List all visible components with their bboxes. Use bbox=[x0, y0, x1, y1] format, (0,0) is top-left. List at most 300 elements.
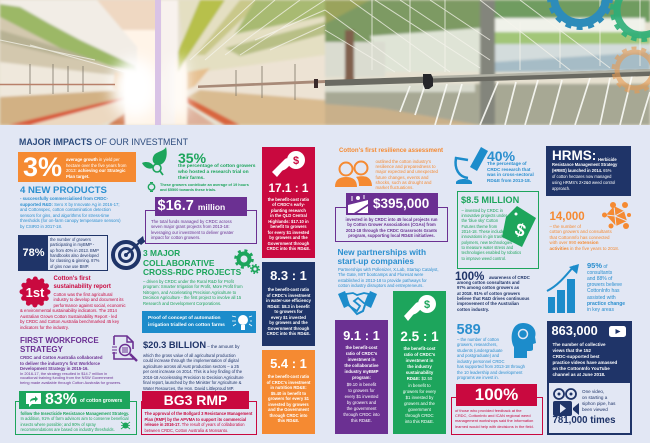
text: local projects: invested in by CRDC into 45 local projects run bbox=[346, 216, 437, 222]
text: workforce funding: being made available through Cotton Australia for growers. bbox=[20, 380, 121, 384]
stat: 78% bbox=[19, 236, 48, 270]
text: channel as at June 2018. bbox=[552, 372, 605, 377]
text: BG3 RMP approval: Plan (RMP) by the APVMA to support its commercial bbox=[144, 417, 246, 422]
text bbox=[266, 196, 310, 251]
text: growers contribution bbox=[160, 183, 249, 192]
text: insecticide strategy: follow the Insecticide Resistance Management Strategy. bbox=[20, 410, 129, 416]
text: sustainability report bbox=[20, 292, 126, 330]
text: sustainability report: Cotton was the first agricultural bbox=[54, 292, 112, 296]
text: on starting a bbox=[582, 394, 607, 400]
text: insecticide strategy: In addition, 91% of farm advisors aim to conserve beneficial bbox=[20, 416, 129, 421]
icon: stopwatch bbox=[148, 182, 156, 192]
text: by growers and the bbox=[269, 235, 308, 240]
text: growers in myBMP: for classing & ginning. 87% bbox=[50, 258, 99, 263]
stat: 35%: 35% bbox=[178, 150, 206, 166]
text: of CRDC's investment bbox=[267, 380, 310, 385]
text: growers contribution: These growers contribute an average of 19 hours bbox=[160, 183, 249, 187]
text: local projects: 2013-18 through the CRDC Grassroots Grants bbox=[346, 228, 437, 233]
text: research trial bbox=[178, 164, 256, 181]
banner bbox=[19, 391, 130, 409]
text: new products: and Cottonspec, cotton contamination detection bbox=[20, 207, 111, 212]
text: CRDC into this RD&E. bbox=[267, 246, 310, 251]
text: sustainability bbox=[406, 370, 433, 375]
text: on the CottonInfo YouTube bbox=[552, 366, 610, 371]
outline bbox=[145, 210, 257, 244]
icon: connected hub bbox=[602, 202, 631, 230]
text: in nutrition RD&E: bbox=[270, 385, 307, 390]
text: resilience assessment: shocks, such as drought and bbox=[376, 180, 431, 185]
text: 14,000: – the number of bbox=[550, 224, 581, 228]
stat: 589: 589 bbox=[456, 322, 481, 338]
text: polymers, new technologies bbox=[462, 240, 512, 245]
panel: HRMS bbox=[546, 146, 631, 196]
text: RD&E: $2.50 bbox=[407, 376, 432, 381]
outline bbox=[15, 401, 137, 435]
text: cross-sectoral research: was in cross-sectoral bbox=[487, 172, 534, 177]
text: and the Government bbox=[268, 407, 309, 412]
text: approach. bbox=[552, 186, 570, 191]
text: resilience assessment: resilience and preparedness to bbox=[376, 164, 436, 169]
text: invested by growers bbox=[268, 402, 309, 407]
panel: automation irrigation callout bbox=[142, 311, 256, 333]
text: new partnerships bbox=[338, 266, 439, 289]
text: 95% consultants: consultants bbox=[587, 270, 612, 276]
text: new products: by CSIRO in 2017-18. bbox=[20, 224, 62, 229]
text bbox=[552, 342, 617, 378]
text: growers in myBMP: up from 40% in 2013. BMP bbox=[50, 248, 99, 253]
card: 5.4:1 bbox=[262, 350, 315, 434]
text: sustainability report: indicators for the industry. bbox=[20, 325, 69, 330]
heading: resilience assessment: Cotton's first resilience assessment bbox=[339, 147, 443, 154]
inset: one video bbox=[548, 383, 630, 433]
text: using HRMS's 2×2&0 weed control bbox=[552, 180, 615, 185]
text: resilience assessment: market fluctuations. bbox=[376, 185, 414, 190]
text: awareness: among cotton consultants and bbox=[457, 280, 520, 285]
text: research trial: who hosted a research trial on bbox=[178, 170, 249, 175]
text: every $1 invested bbox=[271, 315, 306, 320]
text: 589 people: growers, researchers, bbox=[457, 342, 498, 347]
text: to growers for bbox=[274, 309, 303, 314]
text: workforce funding bbox=[20, 370, 121, 385]
stat: $395,000 bbox=[373, 196, 429, 211]
text: new products: thresholds (for on-farm canopy temperature sensors) bbox=[20, 218, 121, 223]
stat: 781,000 times bbox=[552, 415, 616, 426]
text: CRDC into this RD&E. bbox=[267, 331, 310, 336]
text: yield growth: average growth in yield per bbox=[66, 157, 120, 162]
icon: document with magnifier bbox=[112, 335, 138, 362]
text: 95% consultants: CottonInfo has bbox=[587, 288, 620, 294]
text: The number of collective bbox=[552, 342, 606, 346]
text: – invested by CRDC in bbox=[462, 208, 503, 212]
text: new partnerships: Partnerships with Pollenizer, X.Lab, Startup Catalyst, bbox=[338, 266, 439, 272]
text: 14,000: that CottonInfo has connected bbox=[550, 235, 610, 240]
text: awareness: 97% among cotton growers as bbox=[457, 285, 519, 290]
text: cross-sectoral research: CRDC research that bbox=[487, 167, 530, 172]
card: 2.5:1 bbox=[393, 291, 446, 434]
text: digital agriculture bbox=[143, 353, 244, 391]
text: innovations in gin trash, bbox=[462, 234, 505, 239]
text: growers in myBMP: handbooks also developed bbox=[50, 253, 99, 258]
text: resilience assessment: outlined the cotton industry's bbox=[376, 158, 431, 164]
text: ratio of CRDC's bbox=[346, 351, 377, 356]
text: workforce funding: In 2016-17, the strategy resulted in $14.7 million in bbox=[20, 370, 107, 376]
text: sustainability report: & environmental sustainability indicators. The 2014 bbox=[20, 308, 117, 313]
stat: 78%: 78% bbox=[22, 247, 45, 259]
text: new products bbox=[20, 196, 121, 229]
card: 17.1:1 bbox=[262, 147, 315, 258]
heading: new partnerships: start-up companies bbox=[338, 256, 414, 266]
text: growers and the bbox=[404, 401, 435, 406]
icon: video play bbox=[608, 326, 626, 337]
text: major grant projects: impact for cotton growers. bbox=[151, 235, 200, 240]
text: the benefit-cost bbox=[346, 345, 378, 350]
text: planting research bbox=[271, 208, 306, 213]
text: this RD&E. bbox=[351, 418, 372, 423]
text: sustainability report: Australian Grown Cotton Sustainability Report - led bbox=[20, 314, 117, 319]
text: 95% consultants bbox=[587, 270, 625, 313]
text: management workshops said the information bbox=[455, 418, 533, 423]
banner bbox=[456, 384, 537, 406]
text: the industry bbox=[407, 364, 432, 369]
text: to improve weed control. bbox=[462, 256, 506, 261]
text: RD&E: $8.3 in benefit bbox=[267, 304, 310, 309]
banner: $16.7 million bbox=[158, 198, 225, 214]
hero photo: cotton spinning mill bbox=[0, 0, 650, 125]
text: CRDC-supported best bbox=[552, 354, 600, 359]
icon: 1st badge bbox=[20, 276, 50, 308]
icon: handshake bbox=[338, 291, 377, 315]
icon: microscope bbox=[454, 147, 490, 184]
stat: 83%: 83% bbox=[45, 391, 77, 408]
icon: head with gear bbox=[511, 323, 536, 358]
text: the 'blue sky' Cotton bbox=[462, 218, 498, 223]
text: growers contribution: and $5500 towards these trials. bbox=[160, 188, 216, 192]
stat: 100% awareness: 100% bbox=[455, 271, 484, 283]
text: digital agriculture: per cent increase on 2014. This is a key finding of the bbox=[143, 369, 242, 374]
text: resilience assessment: future changes, events and bbox=[376, 175, 428, 180]
text: practice videos have amassed bbox=[552, 360, 617, 365]
text bbox=[266, 374, 310, 423]
text: through CRDC bbox=[405, 413, 434, 418]
text: workforce strategy: to deliver the industry's first Workforce bbox=[20, 361, 100, 366]
outline bbox=[141, 401, 257, 435]
text: cross-RDC projects bbox=[143, 278, 243, 306]
heading: first workforce strategy: FIRST WORKFORCE bbox=[20, 336, 99, 344]
icon: two people bbox=[335, 160, 372, 187]
text: into this RD&E. bbox=[405, 419, 434, 424]
text: awareness: cotton industry. bbox=[457, 307, 489, 312]
text: 95% consultants: and 88% of bbox=[587, 276, 612, 282]
card: 9.1:1 bbox=[335, 320, 388, 434]
text: this RD&E. bbox=[278, 418, 299, 423]
stat: 3%: 3% bbox=[23, 152, 62, 182]
text: 14,000: activities in the five years to 2018. bbox=[550, 246, 619, 251]
text: growers in myBMP: the number of growers bbox=[50, 237, 91, 242]
text: cross-RDC projects: Nitrogen, and Accelerating Precision Agriculture to bbox=[143, 290, 236, 295]
text: major grant projects: leveraging our investment to deliver greater bbox=[151, 230, 234, 235]
text: insecticide strategy: insects where possible; and 90% of spray bbox=[20, 422, 96, 427]
heading: new partnerships: New partnerships with bbox=[338, 247, 426, 257]
heading: 3 major collaborative cross-RDC projects: CROSS-RDC PROJECTS bbox=[143, 267, 241, 277]
text: views that the 152 bbox=[552, 348, 591, 353]
text: new partnerships: The Gate, MIT bootcamps and Fluresat were bbox=[338, 272, 423, 277]
banner bbox=[154, 197, 247, 216]
text bbox=[335, 345, 388, 424]
text: local projects: by Cotton Grower Associations (CGAs) from bbox=[347, 222, 436, 227]
text: resilience assessment: major expected and unexpected bbox=[376, 169, 438, 174]
text: new products: sensors for gins, and algorithms for stress-time bbox=[20, 213, 109, 218]
heading: first workforce strategy: STRATEGY bbox=[20, 344, 63, 354]
text: digital agriculture: agriculture across all Aust production sectors – a 25 bbox=[143, 364, 239, 369]
text: digital agriculture: Water Resources, the Hon. David Littleproud MP. bbox=[143, 386, 234, 391]
text: 14,000: with over 990 extension bbox=[550, 240, 599, 245]
icon: share arrow bbox=[26, 393, 41, 407]
text: workforce funding: vocational training funding from the NSW Government bbox=[20, 375, 113, 380]
text: by growers and the bbox=[269, 320, 308, 325]
text: growers in myBMP bbox=[50, 237, 100, 269]
text: of CRDC's early- bbox=[272, 202, 305, 207]
text: Herbicide bbox=[598, 156, 617, 162]
panel: BG3 RMP bbox=[141, 391, 257, 435]
text: been viewed bbox=[582, 406, 608, 412]
text: 589 people: industry personnel CRDC bbox=[457, 359, 504, 364]
icon: hand with coin: $ bbox=[424, 299, 430, 311]
icon: hand with coin bbox=[403, 294, 437, 324]
heading: sustainability report: Cotton's first bbox=[54, 276, 91, 282]
title: MAJOR IMPACTS OF OUR INVESTMENT bbox=[19, 136, 188, 146]
stat: $20.3 billion: $20.3 BILLION – the amount by bbox=[143, 340, 240, 350]
text: 589 people: and postgraduate) and bbox=[457, 353, 499, 358]
text: 95% consultants: in key areas bbox=[587, 307, 614, 313]
text: $1 invested by bbox=[406, 395, 433, 400]
text: in the QLD Central bbox=[270, 213, 307, 218]
text: to measure water stress and bbox=[462, 245, 513, 250]
text: cross-RDC projects: Research and Development Corporations. bbox=[143, 301, 221, 306]
text: awareness: awareness of CRDC bbox=[489, 274, 530, 280]
text: 95% consultants: growers believe bbox=[587, 282, 622, 288]
panel: 863,000 views bbox=[546, 321, 632, 435]
text: Government through bbox=[268, 241, 309, 246]
text: for every $1 invested bbox=[268, 230, 309, 235]
text: ratio of CRDC's bbox=[404, 352, 435, 357]
stat: 2.5 : 1 bbox=[400, 329, 439, 344]
text: resilience assessment bbox=[376, 158, 438, 190]
text: workforce strategy bbox=[20, 355, 102, 371]
text: 95% consultants: practice change bbox=[587, 301, 625, 307]
icon: gears bbox=[234, 249, 260, 274]
stat: $8.5 MILLION bbox=[461, 195, 519, 205]
text bbox=[582, 388, 615, 412]
text: program: bbox=[352, 375, 371, 380]
icon: price tag bbox=[502, 206, 539, 248]
text: research trial: their farms. bbox=[178, 176, 205, 181]
banner bbox=[346, 193, 438, 215]
text: Futures theme from bbox=[462, 224, 497, 229]
text: digital agriculture: which the gross value of all agricultural production bbox=[143, 353, 236, 358]
text: BG3 RMP approval bbox=[144, 411, 252, 433]
text: yield growth bbox=[66, 157, 126, 179]
panel: $16.7 million bbox=[145, 197, 257, 244]
text: cross-sectoral research: The percentage of bbox=[487, 161, 527, 166]
text: cross-RDC projects: program: Smarter Irrigation for Profit, More Profit from bbox=[143, 284, 243, 289]
text: technologies enabled by robotics bbox=[462, 250, 521, 255]
panel: $8.5 million bbox=[457, 191, 539, 269]
banner: BG3 RMP bbox=[164, 392, 227, 408]
text: yield growth: Plan target. bbox=[66, 174, 89, 179]
text: proof of concept bbox=[148, 316, 225, 328]
text: growers for every $1 bbox=[268, 396, 309, 401]
text: the benefit-cost ratio bbox=[268, 287, 309, 292]
text: Highlands: $17.10 in bbox=[268, 219, 309, 224]
text: cross-RDC projects: Decision Agriculture - the first project to involve all 15 bbox=[143, 295, 241, 300]
text: investment in bbox=[348, 357, 375, 362]
text: every $1 invested bbox=[345, 394, 378, 399]
heading: 4 new products: 4 NEW PRODUCTS bbox=[20, 185, 107, 196]
text: (HRMS) launched in 2014. 65% bbox=[552, 168, 611, 173]
text: proof of concept: irrigation trialled on cotton farms bbox=[148, 323, 225, 328]
stat: 5.4 : 1 bbox=[270, 356, 307, 371]
text bbox=[455, 408, 534, 429]
stat: 9.1 : 1 bbox=[343, 328, 380, 343]
text: awareness: believe that R&D drives continuous bbox=[457, 296, 529, 301]
text: of CRDC's investment bbox=[267, 293, 310, 298]
text: to growers for bbox=[348, 388, 375, 393]
text: major grant projects: The total funds managed by CRDC across bbox=[151, 218, 232, 224]
icon: growing bar chart bbox=[547, 264, 583, 314]
text: local projects bbox=[346, 216, 438, 238]
text: by growers and bbox=[347, 400, 376, 405]
heading: sustainability report: sustainability report bbox=[54, 284, 111, 290]
panel: 83% of cotton growers bbox=[15, 391, 137, 435]
text bbox=[393, 346, 446, 425]
text: BG3 RMP approval: between CRDC, Cotton Australia & Monsanto. bbox=[144, 428, 228, 433]
outline bbox=[451, 397, 543, 435]
text: growers for every bbox=[403, 389, 436, 394]
icon: hand with coin bbox=[272, 151, 305, 177]
text: insecticide strategy: recommendations are based on industry thresholds. bbox=[20, 427, 115, 432]
outline bbox=[335, 207, 448, 242]
text: Resistance Management Strategy bbox=[552, 162, 617, 167]
heading: sustainability report bbox=[54, 276, 111, 290]
text: sustainability report: by CRDC and Cotton Australia benchmarked 45 key bbox=[20, 319, 119, 324]
banner bbox=[142, 391, 249, 409]
text: BG3 RMP approval: release in 2016-17. The result of years of collaboration bbox=[144, 422, 245, 427]
text: yield growth: hectare over the five years from bbox=[66, 163, 126, 168]
stat: 40%: 40% bbox=[487, 148, 515, 164]
text: industry myBMP bbox=[345, 369, 378, 374]
stat: 17.1 : 1 bbox=[268, 181, 308, 195]
text: awareness: improvement of the Australian bbox=[457, 301, 519, 306]
text: 95% consultants: assisted with bbox=[587, 295, 616, 301]
text: benefit to growers bbox=[270, 224, 307, 229]
text: workforce strategy: CRDC and Cotton Australia collaborated bbox=[20, 355, 102, 360]
text bbox=[462, 208, 521, 261]
text: siphon pipe, has bbox=[582, 400, 615, 406]
label: of cotton growers bbox=[80, 398, 122, 404]
text: through CRDC into bbox=[270, 413, 307, 418]
text: growers in myBMP: participating in myBMP - bbox=[50, 242, 94, 247]
text: awareness bbox=[457, 274, 530, 312]
text: of cotton hectares now managed bbox=[552, 174, 611, 179]
text: $5.40 in benefit to bbox=[271, 391, 306, 396]
text: workforce strategy: Development Strategy in 2015-16. bbox=[20, 366, 89, 371]
text: cross-sectoral research: RD&E from 2013-18. bbox=[487, 178, 531, 183]
text: Government through bbox=[268, 326, 309, 331]
icon: hand with coin: $ bbox=[293, 155, 299, 167]
text: new products: - successfully commercialised from CRDC- bbox=[20, 196, 108, 201]
text: new partnerships: established in 2013-18 to provide pathways for bbox=[338, 278, 427, 283]
icon: farm field bbox=[348, 195, 368, 213]
text: CRDC, CottonInfo and ICAN regional weed bbox=[455, 413, 531, 418]
text: investment in bbox=[406, 358, 433, 363]
text: learned would help with decisions in the field. bbox=[455, 424, 534, 429]
text: government bbox=[408, 407, 431, 412]
text: 589 people: – the number of cotton bbox=[457, 337, 499, 342]
text: proof of concept: Proof of concept of automation bbox=[148, 316, 221, 320]
text: 2014-18. These included bbox=[462, 229, 506, 234]
panel: 3% yield growth bbox=[18, 152, 136, 182]
icon: 1st badge: 1st bbox=[26, 285, 45, 300]
panel: 78% myBMP bbox=[18, 235, 108, 271]
text: major grant projects bbox=[151, 218, 234, 240]
icon: target with arrow bbox=[111, 236, 145, 270]
heading: HRMS: bbox=[552, 148, 596, 163]
text: the collaborative bbox=[344, 363, 379, 368]
icon: insect bbox=[120, 422, 130, 430]
text: new partnerships: cotton industry disruptors and entrepreneurs. bbox=[338, 283, 424, 288]
text: of those who provided feedback at the bbox=[455, 408, 522, 413]
text: local projects: program, supporting local RD&E initiatives. bbox=[348, 233, 435, 238]
text: new products: supported R&D: Sero X by Innovate Ag in 2016-17; bbox=[20, 202, 120, 207]
text: the benefit-cost ratio bbox=[268, 196, 309, 202]
card: 8.3:1 bbox=[262, 262, 315, 346]
text: research trial: the percentage of cotton growers bbox=[178, 164, 255, 168]
text: cross-RDC projects: – driven by CRDC under the Rural R&D for Profit bbox=[143, 278, 234, 284]
text: the benefit-cost bbox=[404, 346, 436, 351]
heading: new partnerships bbox=[338, 248, 426, 266]
text: BG3 RMP approval: The approval of the Bollgard 3 Resistance Management bbox=[144, 411, 252, 416]
text: growers in myBMP: of gins now use BMP. bbox=[50, 264, 89, 269]
heading: 3 major collaborative cross-RDC projects: COLLABORATIVE bbox=[143, 258, 214, 268]
text: 589 people bbox=[457, 337, 525, 381]
text: the government bbox=[347, 406, 376, 411]
text: digital agriculture: could increase through the implementation of digital bbox=[143, 358, 239, 363]
banner: 100% bbox=[475, 385, 518, 404]
text: 14,000 bbox=[550, 224, 619, 252]
text: $9.10 in benefit bbox=[347, 382, 376, 387]
text: major grant projects: seven major grant projects from 2013-18: bbox=[151, 224, 230, 229]
text: in benefit to bbox=[408, 383, 431, 388]
panel: 100% workshop feedback bbox=[451, 384, 543, 436]
text: One video, bbox=[582, 388, 604, 394]
text: digital agriculture: 2016-18 Accelerating Precision to Decision Agriculture bbox=[143, 375, 244, 380]
heading: 3 major collaborative cross-RDC projects: 3 MAJOR bbox=[143, 248, 180, 258]
text: 589 people: the 10 leadership and development bbox=[457, 370, 522, 375]
text: insecticide strategy bbox=[20, 410, 129, 432]
panel: $395,000 bbox=[335, 193, 448, 242]
text: cross-sectoral research bbox=[487, 161, 534, 184]
icon: video camera bbox=[552, 388, 580, 416]
text: in water-use efficiency bbox=[266, 298, 311, 303]
stat: 14,000: 14,000 bbox=[550, 211, 585, 223]
heading: 3 major collaborative cross-RDC projects bbox=[143, 248, 241, 277]
text: 14,000: cotton growers and consultants bbox=[550, 229, 612, 234]
text bbox=[552, 156, 617, 192]
text bbox=[266, 287, 311, 336]
text: the benefit-cost ratio bbox=[268, 374, 309, 379]
text: sustainability report: performance against social, economic bbox=[54, 303, 126, 308]
icon: lightbulb bbox=[232, 315, 252, 330]
